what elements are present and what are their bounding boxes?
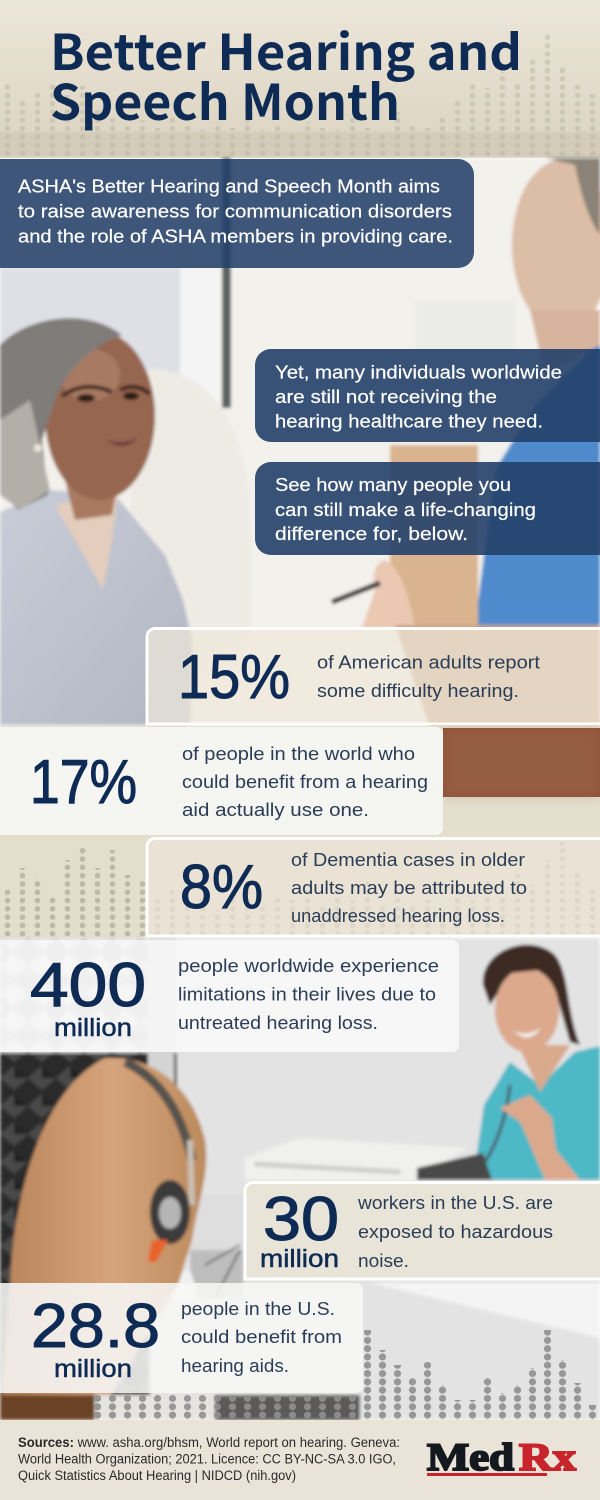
stat panel: 8 percent: unaddressed hearing loss. (291, 905, 505, 926)
photo: audiologist and patient with headphones (0, 938, 600, 1420)
patient with headphones (0, 1058, 206, 1420)
stat panel: 30 million (245, 1182, 600, 1279)
sources text (18, 1435, 400, 1483)
title (50, 14, 522, 135)
stat panel: 28.8 million (0, 1283, 363, 1393)
panel: see how many people callout (255, 462, 600, 555)
panel: intro callout: ASHA's Better Hearing and Speech Month aims (18, 176, 440, 196)
equipment (245, 1138, 467, 1180)
band behind the 8 percent stat with dots (0, 836, 600, 938)
panel: see how many people callout: See how many people you (275, 474, 511, 495)
panel: yet many individuals callout: Yet, many individuals worldwide (275, 362, 562, 382)
stat panel: 8 percent: of Dementia cases in older (291, 849, 525, 870)
stat panel: 30 million: noise. (358, 1250, 409, 1271)
title: Better Hearing and (50, 14, 522, 85)
panel: intro callout: and the role of ASHA members in providing care. (18, 226, 453, 246)
panel: intro callout (0, 159, 474, 268)
stat panel: 17 percent: of people in the world who (182, 743, 415, 764)
grey sound-wave dots at the bottom of the photo (90, 1330, 600, 1420)
woman (0, 318, 192, 725)
photo: woman and clinician (0, 158, 600, 728)
sources text: Quick Statistics About Hearing | NIDCD (nih.gov) (18, 1468, 296, 1483)
sources text: World Health Organization; 2021. Licence: CC BY-NC-SA 3.0 IGO, (18, 1452, 396, 1466)
stat panel: 30 million: workers in the U.S. are (357, 1192, 553, 1213)
clinician (332, 158, 600, 728)
panel: yet many individuals callout: are still not receiving the (275, 386, 497, 407)
stat panel: 400 million: 400 (30, 951, 146, 1020)
footer background (0, 1420, 600, 1500)
stat panel: 30 million: exposed to hazardous (358, 1221, 553, 1242)
stat panel: 30 million: 30 (263, 1185, 339, 1254)
stat panel: 17 percent: aid actually use one. (182, 799, 369, 820)
stat panel: 400 million (0, 940, 459, 1052)
stat panel: 8 percent: 8% (180, 853, 263, 922)
stat panel: 17 percent: 17% (30, 748, 137, 817)
panel: yet many individuals callout: hearing healthcare they need. (275, 410, 543, 432)
stat panel: 400 million: million (54, 1014, 132, 1042)
panel: see how many people callout: difference for, below. (275, 523, 468, 544)
chair (130, 369, 252, 725)
stat panel: 17 percent: could benefit from a hearing (182, 771, 428, 792)
stat panel: 8 percent (147, 838, 600, 936)
stat panel: 15 percent: some difficulty hearing. (317, 680, 519, 701)
stat panel: 8 percent: adults may be attributed to (291, 877, 527, 898)
stat panel: 17 percent (0, 727, 443, 835)
stat panel: 28.8 million: could benefit from (181, 1326, 342, 1347)
stat panel: 400 million: limitations in their lives due to (178, 984, 436, 1004)
stat panel: 400 million: people worldwide experience (178, 955, 439, 976)
header background with sound-wave dots (0, 0, 600, 158)
sources text: Sources: www. asha.org/bhsm, World report on hearing. Geneva: (18, 1435, 400, 1450)
dark and light lower strip (95, 1395, 215, 1420)
stat panel: 30 million: million (260, 1245, 339, 1273)
stat panel: 28.8 million: million (54, 1355, 132, 1383)
panel: yet many individuals callout (255, 349, 600, 442)
panel: see how many people callout: can still make a life-changing (275, 499, 536, 520)
audiologist (417, 945, 600, 1180)
MedRx logo: Rx (519, 1436, 577, 1479)
stat panel: 400 million: untreated hearing loss. (178, 1012, 378, 1033)
arm under the 15 percent panel (395, 625, 600, 728)
stat panel: 28.8 million: hearing aids. (181, 1355, 289, 1376)
stat panel: 28.8 million: 28.8 (31, 1292, 160, 1361)
MedRx logo: Med (427, 1436, 514, 1479)
stat panel: 15 percent: 15% (178, 643, 290, 712)
stat panel: 28.8 million: people in the U.S. (181, 1298, 335, 1319)
panel: intro callout: to raise awareness for communication disorders (18, 200, 452, 222)
band behind the 17 percent stat (0, 726, 600, 836)
MedRx logo (427, 1436, 577, 1479)
title: Speech Month (50, 64, 400, 135)
stat panel: 15 percent (147, 628, 600, 724)
stat panel: 15 percent: of American adults report (317, 652, 540, 672)
